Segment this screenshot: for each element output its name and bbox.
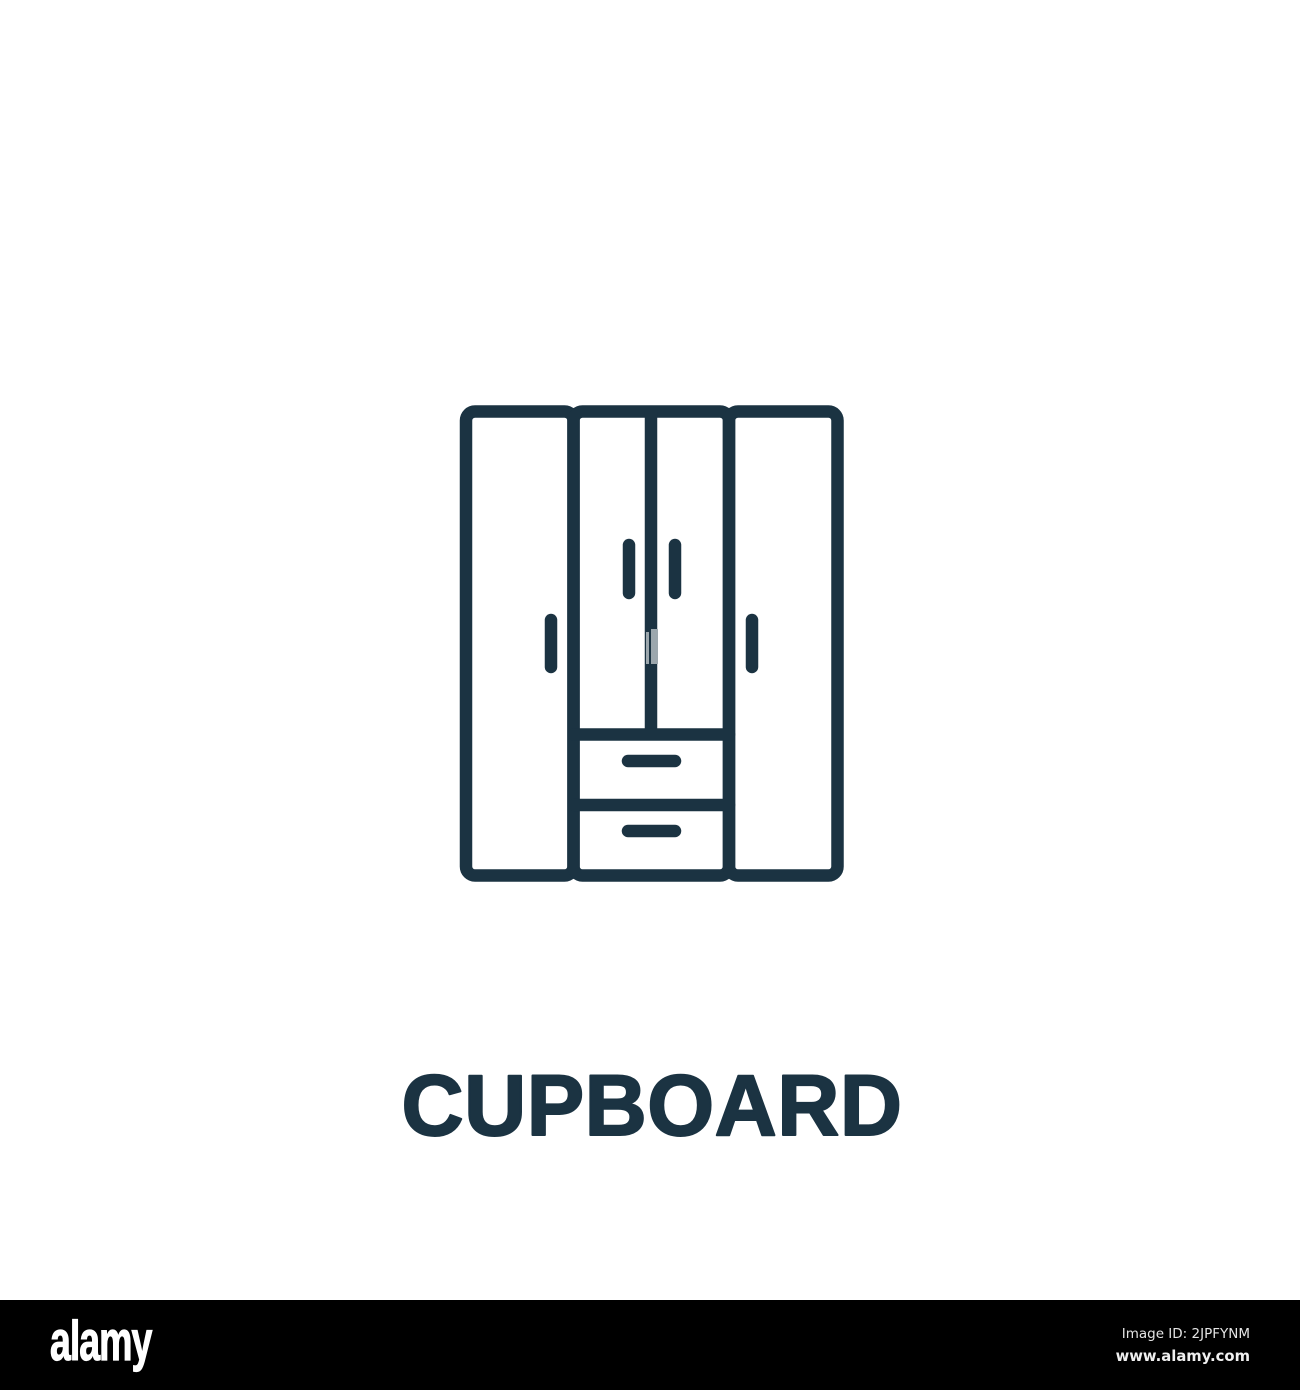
upper drawer handle — [628, 755, 675, 767]
watermark fragment — [646, 629, 658, 664]
alamy logo: alamy — [50, 1311, 153, 1373]
lower drawer handle — [628, 825, 675, 837]
image id: Image ID: 2JPFYNM — [1122, 1326, 1250, 1342]
title: CUPBOARD — [402, 1058, 902, 1154]
website: www.alamy.com — [1116, 1348, 1250, 1365]
right door handle — [746, 620, 758, 667]
right door — [729, 412, 838, 876]
centre right handle — [669, 545, 681, 593]
icon: cupboard — [466, 412, 838, 876]
footer bar — [0, 1300, 1300, 1390]
left door — [466, 412, 574, 876]
centre cabinet — [574, 412, 729, 876]
drawer top rail — [574, 728, 729, 741]
left door handle — [545, 620, 557, 667]
centre left handle — [623, 545, 635, 593]
drawer middle rail — [574, 799, 729, 811]
centre door divider — [645, 412, 657, 734]
